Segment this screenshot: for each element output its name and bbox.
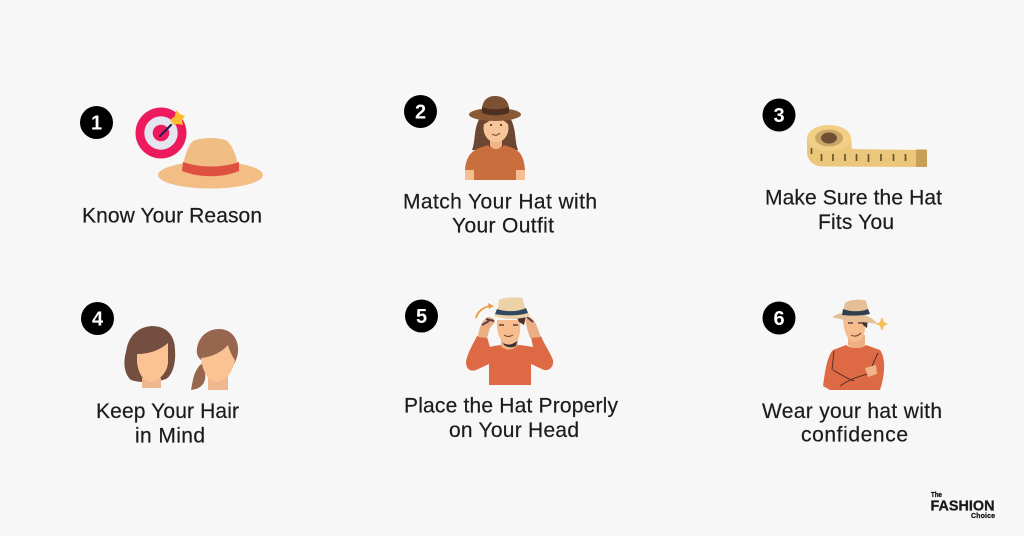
panel: step 4 hair: in Mind <box>135 424 205 448</box>
number badge 4 <box>81 302 114 335</box>
icon: short hair head <box>124 326 175 388</box>
number badge 1 <box>80 106 113 139</box>
label: place the hat properly on your head: Place the Hat Properly <box>404 394 618 418</box>
label: keep your hair in mind: Keep Your Hair <box>96 400 239 423</box>
label: make sure the hat fits you: Make Sure the Hat <box>765 186 942 210</box>
number badge 2: 2 <box>415 102 426 124</box>
panel: step 5 place the hat <box>404 297 618 442</box>
panel: step 5 place the hat: on Your Head <box>449 419 579 442</box>
logo: The Fashion Choice: Choice <box>971 513 995 520</box>
label: wear your hat with confidence: Wear your hat with <box>762 400 942 423</box>
icon: confident man with crossed arms <box>823 300 888 390</box>
logo: The Fashion Choice: The <box>931 492 942 499</box>
number badge 6 <box>762 302 796 334</box>
number badge 3: 3 <box>773 105 785 127</box>
icon: woman in brown hat <box>465 96 525 180</box>
icon: measuring tape <box>807 125 927 167</box>
panel: step 6 wear with confidence <box>762 300 942 446</box>
number badge 3 <box>762 98 796 132</box>
logo: The Fashion Choice <box>930 492 995 520</box>
panel: step 3 hat fit <box>762 98 942 234</box>
icon: ponytail head <box>191 329 238 390</box>
panel: step 6 wear with confidence: confidence <box>801 424 908 446</box>
panel: step 2 match your hat <box>403 95 597 238</box>
panel: step 4 hair <box>81 302 239 448</box>
label: match your hat with your outfit: Match Your Hat with <box>403 190 597 214</box>
icon: target with dart <box>136 108 186 158</box>
number badge 5 <box>405 300 438 332</box>
number badge 5: 5 <box>416 306 427 328</box>
panel: step 2 match your hat: Your Outfit <box>452 214 554 238</box>
icon: straw hat with red band <box>158 138 263 188</box>
number badge 4: 4 <box>92 308 104 330</box>
label: know your reason: Know Your Reason <box>82 204 262 228</box>
number badge 6: 6 <box>773 308 785 330</box>
panel: step 1 know your reason <box>80 106 263 228</box>
number badge 1: 1 <box>91 112 102 134</box>
number badge 2 <box>404 95 437 128</box>
icon: man adjusting hat <box>466 297 553 385</box>
logo: The Fashion Choice: FASHION <box>930 498 994 514</box>
panel: step 3 hat fit: Fits You <box>818 211 894 234</box>
